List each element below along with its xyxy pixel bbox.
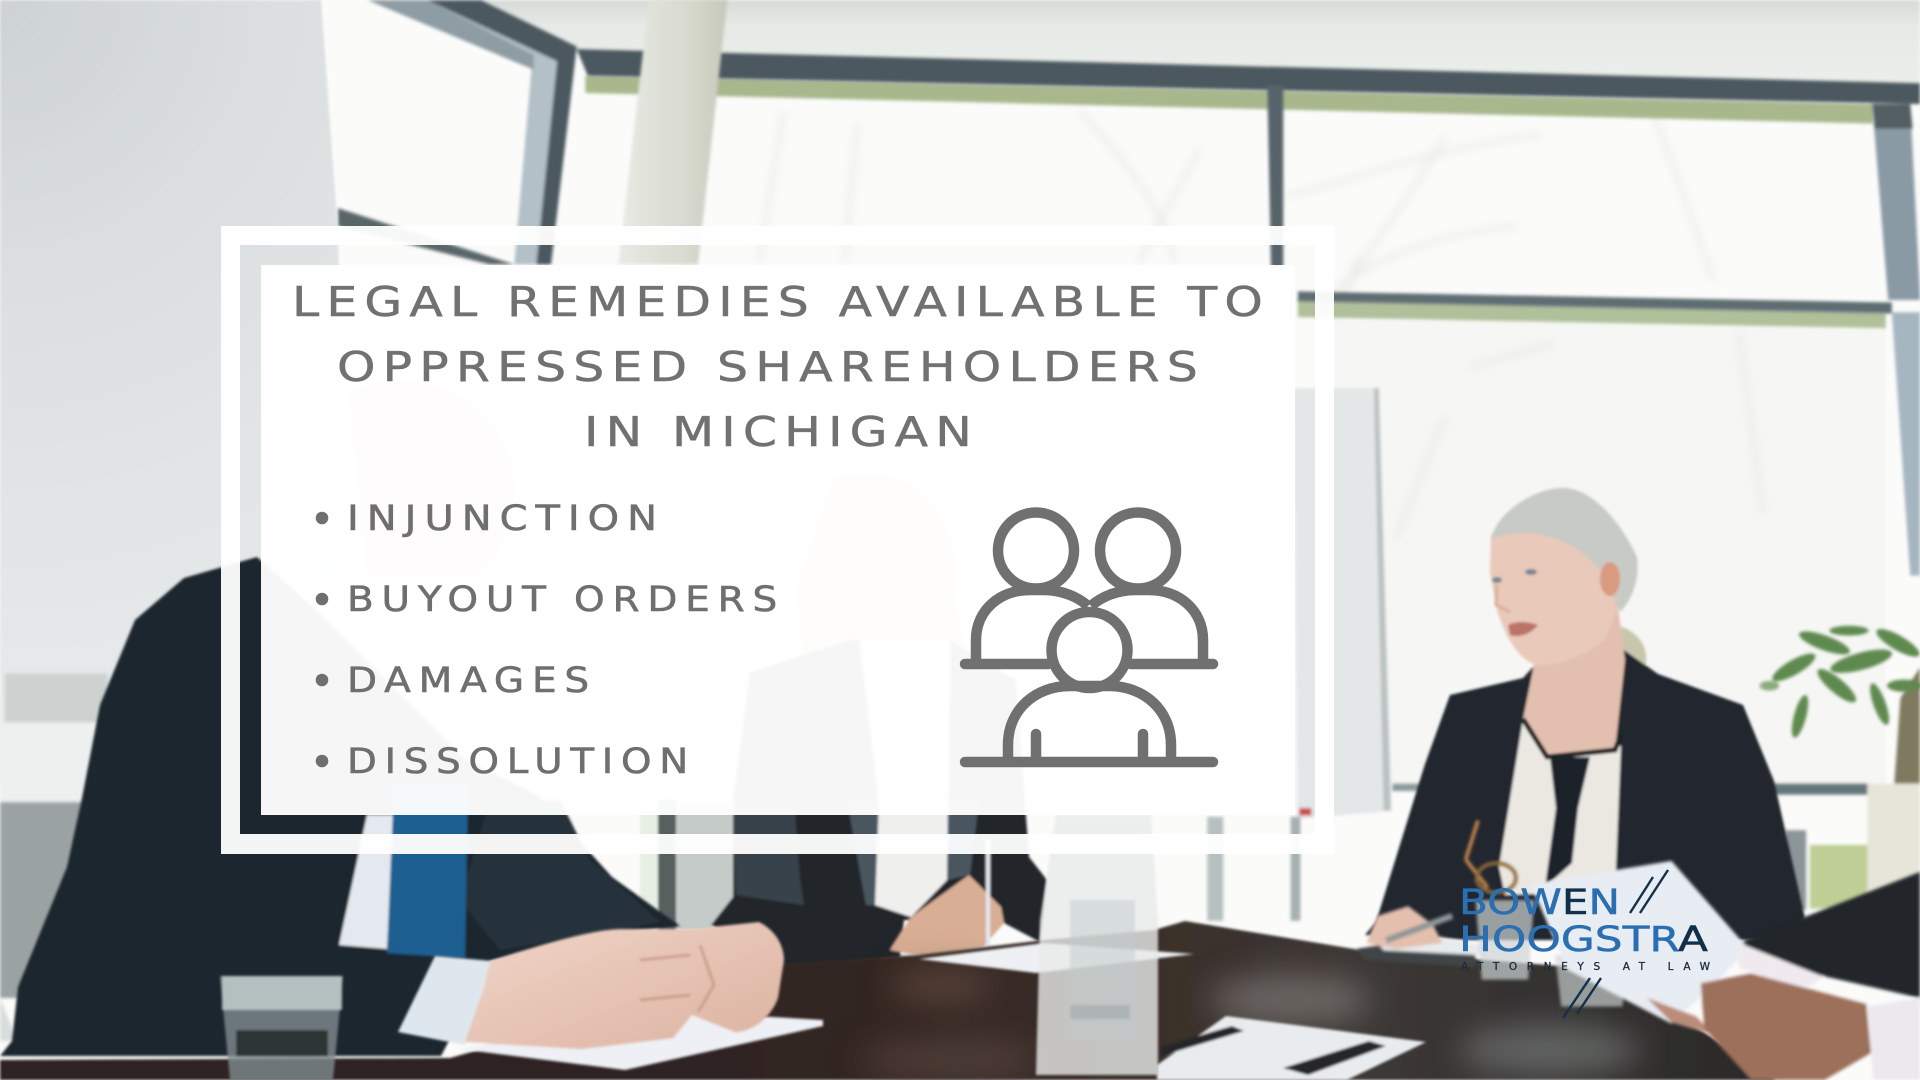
logo wordmark: HOOGSTR A: [1459, 920, 1708, 960]
center woman: chair, jacket, shirt: [640, 640, 1047, 968]
man at right: sleeve, paper and hand: [1531, 861, 1920, 1080]
green window bands: [585, 76, 1886, 328]
logo slashes: [1563, 870, 1668, 1018]
jacket: [1365, 650, 1805, 940]
whiteboard: [1060, 388, 1391, 921]
window frames: [338, 0, 1920, 576]
face: [1490, 518, 1617, 665]
left man's cuff and hands: [398, 922, 784, 1049]
neck and chest: [1523, 600, 1625, 757]
hair: [1491, 488, 1638, 612]
woman at right: [1365, 488, 1805, 940]
table reflections: [860, 969, 1640, 1080]
outer frame ring: [221, 226, 1334, 854]
item: damages: DAMAGES: [347, 661, 597, 701]
icon: group of three people: [965, 512, 1213, 762]
center woman head behind panel: [796, 472, 980, 698]
bullet list of remedies: [316, 499, 785, 782]
man at left: jacket, shirt and tie: [0, 557, 680, 1056]
item: injunction: INJUNCTION: [347, 499, 665, 539]
title: OPPRESSED SHAREHOLDERS: [337, 343, 1205, 391]
item: dissolution: DISSOLUTION: [347, 742, 696, 782]
glass at left: [220, 976, 343, 1080]
pillar: [618, 0, 727, 264]
trees seen through the window: [649, 110, 1763, 539]
ear: [1600, 562, 1620, 596]
logo wordmark: BOW EN: [1459, 883, 1620, 923]
collar and tie: [1523, 719, 1621, 757]
panel background: [261, 265, 1295, 815]
ceiling: [481, 0, 1920, 86]
ponytail: [1615, 625, 1646, 668]
left man seen behind panel: [294, 379, 576, 833]
plant leaves: [1760, 624, 1920, 739]
item: buyout orders: BUYOUT ORDERS: [347, 580, 785, 620]
shirt: [1499, 719, 1621, 895]
panel: main content: [261, 265, 1295, 815]
title: [292, 278, 1270, 456]
title: IN MICHIGAN: [584, 408, 979, 456]
wall: [0, 0, 349, 784]
background right: pot, hedge and plant: [1392, 667, 1920, 912]
logo: Bowen Hoogstra attorneys at law: [1459, 870, 1711, 1018]
papers on table: [459, 943, 1426, 1080]
notebook, woman's hand and pen: [1357, 906, 1482, 967]
logo tagline: ATTORNEYS AT LAW: [1461, 961, 1711, 973]
title: LEGAL REMEDIES AVAILABLE TO: [292, 278, 1270, 326]
glasses on table: [1466, 820, 1629, 1007]
eyes, nose, mouth: [1492, 569, 1537, 583]
shelf and chair at left: [0, 673, 108, 1041]
water bottle at center: [1036, 815, 1158, 1075]
table: [0, 921, 1776, 1080]
logo wordmark: [1459, 883, 1708, 960]
